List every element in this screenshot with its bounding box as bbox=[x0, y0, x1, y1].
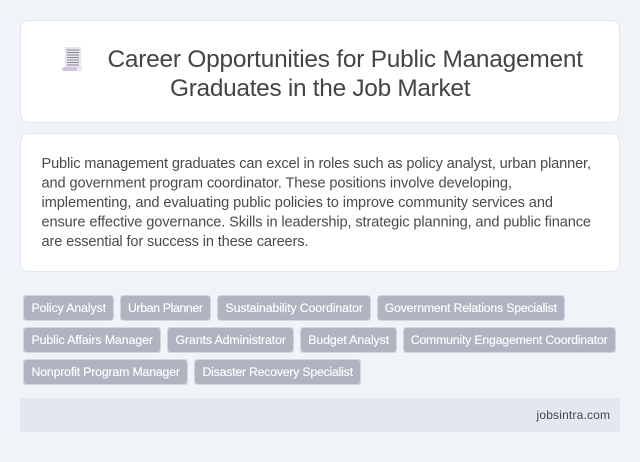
tag: Urban Planner: Urban Planner bbox=[128, 301, 203, 315]
tag: Grants Administrator: Grants Administrator bbox=[176, 333, 286, 347]
description text: and government program coordinator. These positions involve developing, bbox=[42, 176, 512, 192]
tag: Sustainability Coordinator bbox=[218, 296, 370, 320]
footer bar bbox=[20, 398, 620, 432]
description text: implementing, and evaluating public policies to improve community services and bbox=[42, 195, 553, 211]
tag: Government Relations Specialist: Government Relations Specialist bbox=[385, 301, 558, 315]
panel: title card bbox=[20, 20, 620, 122]
title: Career Opportunities for Public Management bbox=[108, 46, 583, 73]
tag: Grants Administrator bbox=[168, 328, 294, 352]
tag: Government Relations Specialist bbox=[378, 296, 564, 320]
tag: Policy Analyst: Policy Analyst bbox=[32, 301, 107, 315]
footer source text: jobsintra.com bbox=[536, 408, 610, 422]
description text: Public management graduates can excel in roles such as policy analyst, urban planner, bbox=[42, 156, 591, 172]
tag: Sustainability Coordinator: Sustainability Coordinator bbox=[226, 301, 363, 315]
description text bbox=[42, 156, 591, 250]
tag: Public Affairs Manager: Public Affairs Manager bbox=[32, 333, 153, 347]
tag: Disaster Recovery Specialist: Disaster Recovery Specialist bbox=[202, 365, 354, 379]
tag: Disaster Recovery Specialist bbox=[194, 360, 360, 384]
title bbox=[108, 46, 583, 102]
tag: Community Engagement Coordinator: Community Engagement Coordinator bbox=[411, 333, 608, 347]
tag: Policy Analyst bbox=[24, 296, 114, 320]
panel: description card bbox=[20, 134, 620, 272]
tag: Community Engagement Coordinator bbox=[404, 328, 616, 352]
tag: Budget Analyst bbox=[300, 328, 396, 352]
tag: Budget Analyst: Budget Analyst bbox=[308, 333, 390, 347]
description text: ensure effective governance. Skills in leadership, strategic planning, and public finance bbox=[42, 214, 591, 230]
panel: job role tags bbox=[24, 296, 616, 384]
tag: Urban Planner bbox=[120, 296, 210, 320]
title: Graduates in the Job Market bbox=[170, 75, 471, 102]
tag: Nonprofit Program Manager: Nonprofit Program Manager bbox=[32, 365, 180, 379]
tag: Nonprofit Program Manager bbox=[24, 360, 188, 384]
icon: paper scroll document bbox=[62, 47, 82, 71]
tag: Public Affairs Manager bbox=[24, 328, 160, 352]
description text: are essential for success in these careers. bbox=[42, 234, 308, 250]
